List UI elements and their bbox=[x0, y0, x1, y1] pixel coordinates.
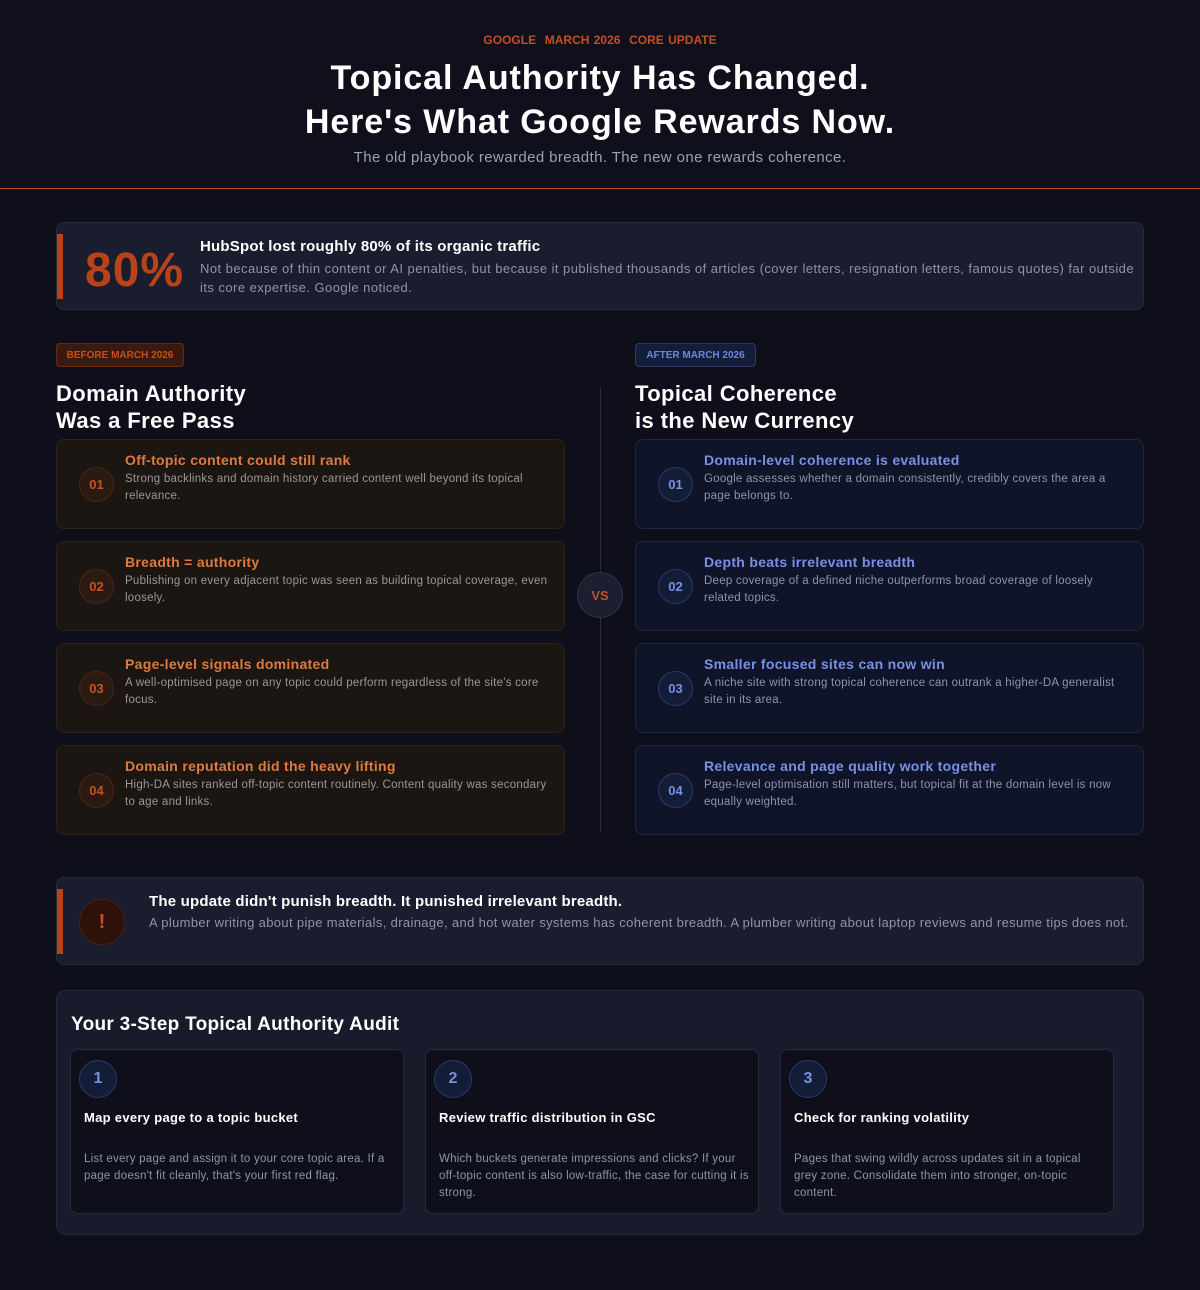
before card 2: Publishing on every adjacent topic was seen as building topical coverage, even loosely. bbox=[125, 575, 547, 604]
audit panel bbox=[56, 990, 1144, 1235]
callout bbox=[56, 877, 1144, 965]
badge after bbox=[635, 343, 756, 367]
before card 4: High-DA sites ranked off-topic content routinely. Content quality was secondary to age and links. bbox=[125, 779, 546, 808]
before card 4: Domain reputation did the heavy lifting bbox=[125, 758, 396, 774]
after card 3: Smaller focused sites can now win bbox=[704, 656, 945, 672]
callout heading: The update didn't punish breadth. It punished irrelevant breadth. bbox=[149, 893, 622, 910]
title bbox=[305, 59, 895, 141]
before card 4: 04 bbox=[89, 783, 104, 798]
header bbox=[0, 0, 1200, 189]
before card 2: 02 bbox=[89, 579, 104, 594]
title: Topical Authority Has Changed. bbox=[331, 59, 869, 97]
after card 3 bbox=[635, 643, 1144, 733]
before card 2 bbox=[56, 541, 565, 631]
after card 3: 03 bbox=[668, 681, 683, 696]
before card 4 bbox=[56, 745, 565, 835]
badge before: BEFORE MARCH 2026 bbox=[67, 350, 173, 360]
eyebrow: GOOGLE MARCH 2026 CORE UPDATE bbox=[483, 33, 717, 47]
before card 3: A well-optimised page on any topic could perform regardless of the site's core focus. bbox=[125, 677, 539, 706]
after card 2: Deep coverage of a defined niche outperforms broad coverage of loosely related topics. bbox=[704, 575, 1093, 604]
after card 4 bbox=[635, 745, 1144, 835]
stat panel bbox=[56, 222, 1144, 310]
callout body: A plumber writing about pipe materials, drainage, and hot water systems has coherent breadth. A plumber writing about laptop reviews and resume tips does not. bbox=[149, 915, 1129, 930]
heading after bbox=[635, 381, 854, 433]
vs icon bbox=[577, 572, 623, 618]
before card 1: 01 bbox=[89, 477, 104, 492]
before card 3: Page-level signals dominated bbox=[125, 656, 329, 672]
after card 3: A niche site with strong topical coherence can outrank a higher-DA generalist site in its area. bbox=[704, 677, 1114, 706]
heading before: Domain Authority bbox=[56, 381, 246, 406]
step 3: Check for ranking volatility bbox=[794, 1110, 969, 1125]
heading before: Was a Free Pass bbox=[56, 408, 235, 433]
after card 2 bbox=[635, 541, 1144, 631]
before card 1: Strong backlinks and domain history carried content well beyond its topical relevance. bbox=[125, 473, 523, 502]
title: Here's What Google Rewards Now. bbox=[305, 103, 895, 141]
step 2: 2 bbox=[449, 1070, 457, 1087]
icon: warning: ! bbox=[99, 910, 105, 932]
before card 3: 03 bbox=[89, 681, 104, 696]
before card 1 bbox=[56, 439, 565, 529]
after card 1: 01 bbox=[668, 477, 683, 492]
step 3: Pages that swing wildly across updates sit in a topical grey zone. Consolidate them into stronger, on-topic content. bbox=[794, 1153, 1081, 1199]
before card 1: Off-topic content could still rank bbox=[125, 452, 351, 468]
step 3 bbox=[780, 1049, 1114, 1214]
after card 4: Page-level optimisation still matters, but topical fit at the domain level is now equally weighted. bbox=[704, 779, 1111, 808]
after card 1: Google assesses whether a domain consistently, credibly covers the area a page belongs to. bbox=[704, 473, 1106, 502]
stat heading: HubSpot lost roughly 80% of its organic traffic bbox=[200, 238, 540, 255]
before card 3 bbox=[56, 643, 565, 733]
big stat: 80% bbox=[85, 244, 184, 297]
step 3: 3 bbox=[804, 1070, 812, 1087]
after card 1: Domain-level coherence is evaluated bbox=[704, 452, 960, 468]
step 1: 1 bbox=[94, 1070, 102, 1087]
heading after: is the New Currency bbox=[635, 408, 854, 433]
step 2: Which buckets generate impressions and clicks? If your off-topic content is also low-traffic, the case for cutting it is strong. bbox=[439, 1153, 749, 1199]
after card 4: Relevance and page quality work together bbox=[704, 758, 996, 774]
heading before bbox=[56, 381, 246, 433]
heading after: Topical Coherence bbox=[635, 381, 837, 406]
before card 2: Breadth = authority bbox=[125, 554, 259, 570]
vs icon: VS bbox=[591, 588, 609, 602]
after card 2: 02 bbox=[668, 579, 683, 594]
step 2 bbox=[425, 1049, 759, 1214]
step 2: Review traffic distribution in GSC bbox=[439, 1110, 656, 1125]
badge before bbox=[56, 343, 184, 367]
subtitle: The old playbook rewarded breadth. The new one rewards coherence. bbox=[354, 149, 846, 166]
badge after: AFTER MARCH 2026 bbox=[646, 350, 745, 360]
after card 4: 04 bbox=[668, 783, 683, 798]
step 1 bbox=[70, 1049, 404, 1214]
audit title: Your 3-Step Topical Authority Audit bbox=[71, 1014, 399, 1035]
after card 2: Depth beats irrelevant breadth bbox=[704, 554, 915, 570]
icon: warning bbox=[79, 899, 125, 945]
step 1: Map every page to a topic bucket bbox=[84, 1110, 298, 1125]
stat body: Not because of thin content or AI penalties, but because it published thousands of articles (cover letters, resignation letters, famous quotes) far outside its core expertise. Google noticed. bbox=[200, 261, 1134, 295]
step 1: List every page and assign it to your core topic area. If a page doesn't fit cleanly, that's your first red flag. bbox=[84, 1153, 384, 1182]
after card 1 bbox=[635, 439, 1144, 529]
